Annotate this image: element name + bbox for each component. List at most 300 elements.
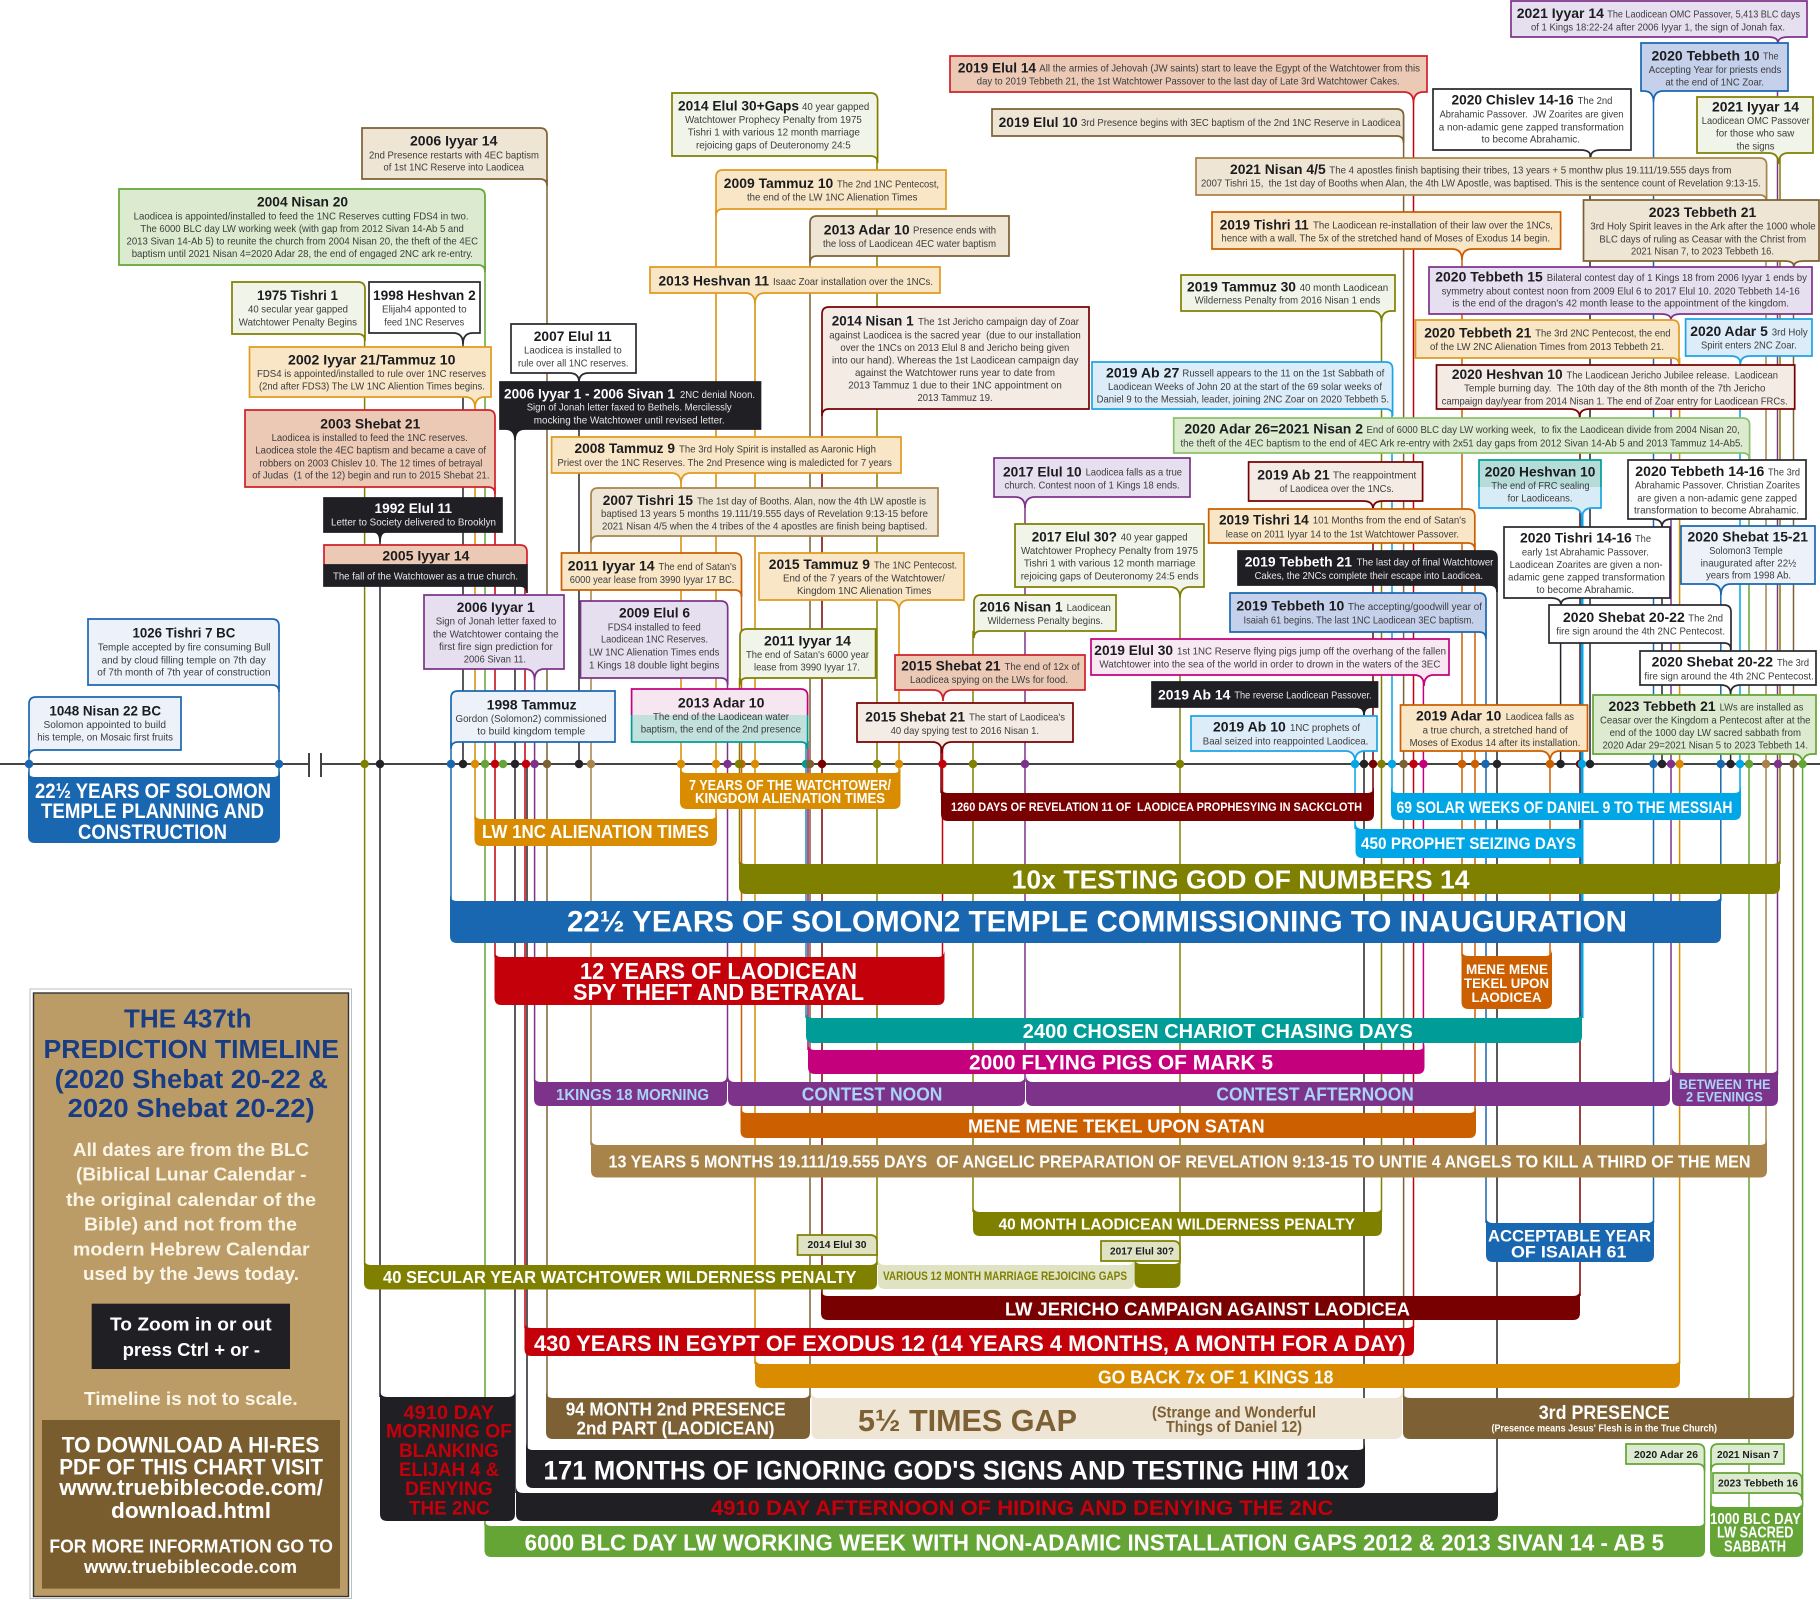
callout: 2020 Adar 26=2021 Nisan 2 [1174, 418, 1750, 460]
callout: 2013 Adar 10 presence ends [810, 216, 1009, 263]
callout: 1026 Tishri 7 BC: of 7th month of 7th year of construction [97, 667, 271, 679]
bar: mene mene tekel upon Laodicea: MENE MENE [1466, 962, 1548, 977]
text: calendar note: (Biblical Lunar Calendar - [76, 1164, 306, 1184]
callout: 2023 Tebbeth 21 green [1593, 695, 1816, 764]
callout: 2004 Nisan 20 [119, 189, 485, 272]
callout: 2019 Elul 14: 2019 Elul 14 [958, 59, 1036, 75]
callout: 2011 Iyyar 14 lease end: 2011 Iyyar 14 [568, 558, 655, 574]
callout: 2007 Elul 11 [511, 324, 636, 382]
bar: 10x testing God: 10x TESTING GOD OF NUMBERS 14 [1012, 864, 1470, 894]
callout: 2020 Tebbeth 10 [1641, 43, 1788, 102]
callout: 2013 Adar 10 presence ends: the loss of Laodicean 4EC water baptism [823, 238, 996, 250]
callout: 2019 Ab 21: of Laodicea over the 1NCs. [1280, 483, 1394, 495]
callout: 2019 Tammuz 30: 2019 Tammuz 30 [1187, 279, 1296, 295]
bar: 4910 day morning: BLANKING [399, 1440, 499, 1462]
bar: 12 years of Laodicean spy theft [494, 950, 944, 1005]
bar: 4910 day morning: DENYING [405, 1478, 493, 1500]
callout: 2004 Nisan 20: The 6000 BLC day LW working week (with gap from 2012 Sivan 14-Ab 5 and [140, 223, 464, 235]
callout: 2017 Elul 10: 2017 Elul 10 [1003, 463, 1082, 479]
bar: go back 7x: GO BACK 7x OF 1 KINGS 18 [1098, 1366, 1333, 1388]
bar: 6000 BLC day working week: 6000 BLC DAY LW WORKING WEEK WITH NON-ADAMIC INSTALLATION GAPS 2012 & 2013 SIVAN 14 - AB 5 [525, 1529, 1664, 1555]
label: 2017 Elul 30?: 2017 Elul 30? [1110, 1246, 1174, 1258]
callout: 2019 Elul 30: 1st 1NC Reserve flying pigs jump off the overhang of the fallen [1177, 645, 1446, 657]
text: calendar note: All dates are from the BLC [73, 1139, 309, 1160]
callout: 1026 Tishri 7 BC: 1026 Tishri 7 BC [132, 625, 235, 641]
bar: 430 years in Egypt: 430 YEARS IN EGYPT OF EXODUS 12 (14 YEARS 4 MONTHS, A MONTH FOR A DAY) [534, 1331, 1406, 1356]
callout: 2019 Ab 27: Daniel 9 to the Messiah, leader, joining 2NC Zoar on 2020 Tebbeth 5. [1097, 394, 1389, 406]
bar: 4910 day morning [380, 1390, 515, 1521]
callout: 2009 Tammuz 10: The 2nd 1NC Pentecost, [837, 178, 939, 190]
callout: 2019 Elul 14 [950, 56, 1427, 103]
text: calendar note [66, 1139, 316, 1284]
text: calendar note: used by the Jews today. [83, 1263, 299, 1284]
bar: various 12 month marriage rejoicing gaps [878, 1258, 1134, 1289]
callout: 2016 Nisan 1: Wilderness Penalty begins. [988, 615, 1103, 627]
callout: 2005 Iyyar 14: 2005 Iyyar 14 [382, 547, 470, 563]
callout: 2013 Adar 10 water baptism: The end of the Laodicean water [653, 711, 789, 723]
callout: 1998 Heshvan 2 [369, 282, 480, 344]
callout: 2019 Ab 10: Baal seized into reappointed Laodicea. [1203, 736, 1368, 748]
callout: 2014 Nisan 1: 2014 Nisan 1 [832, 313, 914, 329]
callout: 2013 Adar 10 water baptism [632, 689, 808, 749]
callout: 2017 Elul 30?: rejoicing gaps of Deuteronomy 24:5 ends [1021, 570, 1199, 582]
heading: the 437th prediction timeline: 2020 Shebat 20-22) [68, 1095, 315, 1123]
callout: 2013 Heshvan 11: 2013 Heshvan 11 [658, 273, 769, 289]
callout: 2019 Ab 10: 1NC prophets of [1290, 722, 1360, 734]
bar: 5½ times gap: 5½ TIMES GAP [858, 1403, 1077, 1438]
callout: 2011 Iyyar 14 olive: 2011 Iyyar 14 [764, 633, 851, 649]
callout: 2019 Tebbeth 21: The last day of final Watchtower [1357, 557, 1494, 569]
callout: 2016 Nisan 1 [974, 595, 1116, 638]
callout: 2020 Chislev 14-16: 2020 Chislev 14-16 [1452, 92, 1574, 108]
callout: 2015 Shebat 21 end of spying: 2015 Shebat 21 [901, 658, 1001, 674]
bar: contest afternoon [1026, 1075, 1670, 1106]
callout: 2008 Tammuz 9: Priest over the 1NC Reserves. The 2nd Presence wing is maledicted for 7 years [558, 457, 892, 469]
callout: 2006 Iyyar 1 sign of Jonah: 2006 Iyyar 1 [457, 599, 535, 615]
callout: 2023 Tebbeth 21 green: end of the 1000 day LW sacred sabbath from [1610, 727, 1801, 739]
callout: 2020 Chislev 14-16: a non-adamic gene zapped transformation [1439, 121, 1624, 133]
bar: LW 1NC alienation times [474, 812, 717, 846]
callout: 1998 Heshvan 2: feed 1NC Reserves [384, 316, 464, 328]
callout: 2023 Tebbeth 21 green: 2023 Tebbeth 21 [1608, 698, 1716, 714]
bar: 22½ years of Solomon: 22½ YEARS OF SOLOMON [35, 780, 271, 803]
bar: 2400 chosen chariot chasing days [806, 1011, 1582, 1043]
callout: 2020 Tebbeth 14-16: transformation to become Abrahamic. [1634, 505, 1799, 517]
bar: 22½ years of Solomon: TEMPLE PLANNING AND [41, 800, 264, 823]
callout: 2020 Tebbeth 14-16 [1628, 460, 1806, 527]
callout: 2020 Shebat 20-22 3rd fire sign: 2020 Shebat 20-22 [1652, 654, 1773, 670]
bar: 1000 BLC day sabbath: 1000 BLC DAY [1710, 1511, 1801, 1528]
callout: 2009 Tammuz 10 [716, 170, 946, 216]
callout: 2020 Tebbeth 21 orange: of the LW 2NC Alienation Times from 2013 Tebbeth 21. [1430, 341, 1664, 353]
callout: 1992 Elul 11: 1992 Elul 11 [374, 500, 452, 516]
bar: LW 1NC alienation times: LW 1NC ALIENATION TIMES [482, 821, 709, 842]
text: calendar note: the original calendar of the [66, 1189, 316, 1210]
label: 2014 Elul 30: 2014 Elul 30 [808, 1240, 867, 1251]
timeline axis with break mark [0, 753, 1820, 777]
label: 2014 Elul 30 [798, 1235, 877, 1255]
callout: 2015 Tammuz 9: Kingdom 1NC Alienation Times [797, 585, 931, 597]
bar: mene mene tekel upon Satan [740, 1106, 1476, 1138]
callout: 2013 Heshvan 11: Isaac Zoar installation over the 1NCs. [773, 276, 933, 288]
bar: contest noon [728, 1075, 1025, 1106]
callout: 2017 Elul 30?: Watchtower Prophecy Penalty from 1975 [1021, 545, 1198, 557]
bar: go back 7x [755, 1357, 1680, 1388]
callout: 2020 Tishri 14-16: 2020 Tishri 14-16 [1520, 530, 1632, 546]
bar: 40 secular year penalty: 40 SECULAR YEAR WATCHTOWER WILDERNESS PENALTY [383, 1267, 857, 1287]
callout: 2021 Iyyar 14 olive: for those who saw [1716, 128, 1795, 140]
callout: 2019 Elul 14: All the armies of Jehovah (JW saints) start to leave the Egypt of the Watchtower from this [1039, 63, 1420, 75]
callout: 2021 Iyyar 14 olive: the signs [1737, 140, 1774, 152]
callout: 2019 Tebbeth 10: The accepting/goodwill year of [1348, 601, 1482, 613]
callout: 2014 Nisan 1: 2013 Tammuz 19. [918, 392, 993, 404]
callout: 2021 Iyyar 14 OMC Passover: 2021 Iyyar 14 [1517, 5, 1604, 21]
callout: 2019 Tishri 11 [1212, 212, 1561, 260]
callout: 2021 Nisan 4/5 [1196, 158, 1767, 202]
callout: 2019 Tishri 11: hence with a wall. The 5x of the stretched hand of Moses of Exodus 14 begin. [1221, 233, 1550, 245]
callout: 2008 Tammuz 9: 2008 Tammuz 9 [574, 440, 675, 456]
callout: 2020 Tebbeth 21 orange: 2020 Tebbeth 21 [1424, 324, 1532, 340]
callout: 2020 Tishri 14-16: to become Abrahamic. [1536, 584, 1634, 596]
callout: 2020 Tebbeth 21 orange [1416, 320, 1679, 365]
bar: 22½ years of Solomon2 [450, 894, 1721, 943]
bar: acceptable year of Isaiah 61: ACCEPTABLE YEAR [1488, 1227, 1651, 1246]
callout: 2014 Elul 30+Gaps: Watchtower Prophecy Penalty from 1975 [685, 114, 862, 126]
callout: 2020 Adar 26=2021 Nisan 2: End of 6000 BLC day LW working week, to fix the Laodicean divide from 2004 Nisan 20, [1366, 424, 1740, 436]
callout: 2021 Nisan 4/5: 2021 Nisan 4/5 [1230, 161, 1326, 177]
callout: 1998 Tammuz [451, 691, 615, 749]
bar: 12 years of Laodicean spy theft: 12 YEARS OF LAODICEAN [580, 958, 857, 984]
callout: 2019 Elul 14: day to 2019 Tebbeth 21, the 1st Watchtower Passover to the last day of Late 3rd Watchtower Cakes. [977, 76, 1400, 88]
label: 2017 Elul 30? [1101, 1241, 1180, 1261]
callout: 1048 Nisan 22 BC: his temple, on Mosaic first fruits [37, 732, 173, 744]
panel: download information: www.truebiblecode.com/ [58, 1475, 323, 1500]
callout: 2007 Tishri 15: 2007 Tishri 15 [603, 492, 693, 508]
callout: 2019 Adar 10: a true church, a stretched hand of [1423, 724, 1568, 736]
callout: 2003 Shebat 21: robbers on 2003 Chislev 10. The 12 times of betrayal [259, 457, 482, 469]
bar: 4910 day morning: ELIJAH 4 & [399, 1459, 499, 1481]
callout: 2019 Ab 27: Russell appears to the 11 on the 1st Sabbath of [1182, 368, 1384, 380]
callout: 1998 Tammuz: 1998 Tammuz [487, 696, 576, 712]
callout: 2020 Tebbeth 21 orange: The 3rd 2NC Pentecost, the end [1535, 328, 1671, 340]
callout: 2011 Iyyar 14 lease end: The end of Satan's [658, 561, 736, 573]
callout: 2006 Iyyar 14: of 1st 1NC Reserve into Laodicea [384, 162, 524, 174]
callout: 2004 Nisan 20: Laodicea is appointed/installed to feed the 1NC Reserves cutting FDS4 in two. [134, 210, 469, 222]
callout: 2003 Shebat 21 [245, 410, 495, 494]
callout: 2014 Elul 30+Gaps: rejoicing gaps of Deuteronomy 24:5 [696, 139, 851, 151]
callout: 2020 Chislev 14-16: to become Abrahamic. [1482, 134, 1580, 146]
callout: 2020 Shebat 15-21: Solomon3 Temple [1709, 545, 1783, 557]
bar: 1 Kings 18 morning: 1KINGS 18 MORNING [556, 1087, 709, 1104]
bar: 5½ times gap [812, 1391, 1402, 1439]
panel: download information [42, 1420, 340, 1589]
callout: 2015 Shebat 21 end of spying [895, 655, 1085, 701]
label: 2020 Adar 26: 2020 Adar 26 [1634, 1450, 1698, 1461]
callout: 2020 Shebat 15-21: years from 1998 Ab. [1706, 569, 1791, 581]
callout: 2020 Heshvan 10 FRC sealing: for Laodiceans. [1508, 493, 1572, 505]
callout: 2014 Nisan 1: The 1st Jericho campaign day of Zoar [918, 316, 1079, 328]
callout: 2015 Shebat 21 spying test: 40 day spying test to 2016 Nisan 1. [891, 725, 1039, 737]
bar: 4910 day morning: 4910 DAY [404, 1402, 494, 1424]
callout: 2013 Adar 10 presence ends: Presence ends with [913, 225, 996, 237]
callouts centre cluster [632, 56, 1767, 762]
callout: 2023 Tebbeth 21 tan [1584, 200, 1819, 266]
bar: LW Jericho campaign [821, 1289, 1580, 1320]
callout: 2019 Tebbeth 21 [1238, 551, 1497, 592]
callout: 2009 Tammuz 10: the end of the LW 1NC Alienation Times [747, 191, 918, 203]
bar: 430 years in Egypt [524, 1321, 1414, 1356]
callout: 2007 Elul 11: rule over all 1NC reserves. [518, 357, 628, 369]
small bar date labels [798, 1235, 1802, 1500]
callout: 2020 Adar 5: Spirit enters 2NC Zoar. [1701, 340, 1797, 352]
callout: 2011 Iyyar 14 olive [740, 629, 876, 685]
callout: 2015 Shebat 21 spying test: The start of Laodicea's [969, 712, 1065, 724]
bar: 2000 flying pigs [808, 1043, 1424, 1074]
label: 2020 Adar 26 [1626, 1444, 1704, 1471]
bar: between the 2 evenings: BETWEEN THE [1679, 1076, 1770, 1092]
bar: 3rd presence [1403, 1391, 1794, 1439]
bar: 22½ years of Solomon2: 22½ YEARS OF SOLOMON2 TEMPLE COMMISSIONING TO INAUGURATION [567, 906, 1627, 938]
callout: 2019 Tishri 14 [1209, 509, 1475, 550]
bar: 7 years of the Watchtower [680, 766, 900, 809]
callout: 2017 Elul 30?: 40 year gapped [1121, 532, 1188, 544]
panel: download information: FOR MORE INFORMATION GO TO [49, 1536, 333, 1556]
callout: 2020 Tishri 14-16: The [1635, 533, 1651, 545]
bar: 450 prophet seizing days [1356, 822, 1584, 858]
callout: 2020 Shebat 20-22 2nd fire sign: fire sign around the 4th 2NC Pentecost. [1556, 626, 1725, 638]
callout: 2020 Chislev 14-16: Abrahamic Passover. JW Zoarites are given [1440, 109, 1624, 121]
callout: 2006 Iyyar 1 - 2006 Sivan 1: Sign of Jonah letter faxed to Bethels. Mercilessly [527, 402, 732, 414]
callout: 2021 Iyyar 14 OMC Passover: of 1 Kings 18:22-24 after 2006 Iyyar 1, the sign of Jonah fax. [1531, 21, 1785, 33]
callout: 2009 Elul 6: FDS4 installed to feed [608, 621, 701, 633]
callout: 2020 Heshvan 10 FRC sealing [1479, 460, 1601, 519]
callout: 2008 Tammuz 9 [552, 437, 901, 484]
callout: 2006 Iyyar 14: 2006 Iyyar 14 [410, 133, 498, 149]
callout: 1975 Tishri 1: 1975 Tishri 1 [257, 287, 338, 303]
callout: 2011 Iyyar 14 lease end: 6000 year lease from 3990 Iyyar 17 BC. [570, 574, 734, 586]
callout: 2015 Tammuz 9: The 1NC Pentecost. [874, 559, 957, 571]
callout: 1026 Tishri 7 BC: Temple accepted by fire consuming Bull [98, 642, 270, 654]
callout: 2019 Ab 14: The reverse Laodicean Passover. [1234, 689, 1372, 701]
label: 2023 Tebbeth 16: 2023 Tebbeth 16 [1718, 1478, 1798, 1490]
bar: 2400 chosen chariot chasing days: 2400 CHOSEN CHARIOT CHASING DAYS [1023, 1021, 1413, 1043]
callout: 2020 Tebbeth 10: The [1763, 51, 1779, 63]
bar: 13 years 5 months [591, 1138, 1767, 1178]
callout: 1026 Tishri 7 BC: and by cloud filling temple on 7th day [102, 654, 266, 666]
callout: 2014 Nisan 1: against Laodicea is the sacred year (due to our installation [829, 329, 1081, 341]
bar: 5½ times gap: Things of Daniel 12) [1166, 1419, 1302, 1436]
bar: 7 years of the Watchtower: 7 YEARS OF THE WATCHTOWER/ [689, 778, 891, 794]
callout: 2004 Nisan 20: 2004 Nisan 20 [257, 194, 348, 210]
callout: 2020 Shebat 20-22 3rd fire sign: The 3rd [1777, 657, 1809, 669]
bar: between the 2 evenings: 2 EVENINGS [1686, 1089, 1763, 1105]
label: 2021 Nisan 7 [1711, 1444, 1784, 1471]
callout: 2020 Tebbeth 15: symmetry about contest noon from 2009 Elul 6 to 2017 Elul 10. 2020 Tebbeth 14-16 [1442, 285, 1800, 297]
callout: 2015 Tammuz 9: 2015 Tammuz 9 [769, 556, 870, 572]
callout: 2019 Tebbeth 10: 2019 Tebbeth 10 [1236, 598, 1345, 614]
callout: 2007 Tishri 15: 2021 Nisan 4/5 when the 4 tribes of the 4 apostles are finish being baptised. [602, 521, 927, 533]
bar: contest noon: CONTEST NOON [802, 1084, 942, 1104]
callout: 2021 Iyyar 14 OMC Passover [1511, 1, 1807, 43]
callout: 1975 Tishri 1: Watchtower Penalty Begins [239, 316, 357, 328]
callout: 2020 Heshvan 10 Jubilee [1436, 365, 1795, 417]
callout: 2019 Ab 27: Laodicean Weeks of John 20 at the start of the 69 solar weeks of [1108, 381, 1382, 393]
callout: 2020 Tebbeth 15 [1429, 267, 1812, 320]
callout: 2011 Iyyar 14 olive: The end of Satan's 6000 year [746, 649, 869, 661]
callout: 2009 Tammuz 10: 2009 Tammuz 10 [724, 175, 834, 191]
callout: 2020 Adar 26=2021 Nisan 2: the theft of the 4EC baptism to the end of 4EC Ark re-entry with 2x51 day gaps from 2012 Sivan 14-Ab 5 and 2013 Tammuz 14-Ab5. [1180, 437, 1743, 449]
callout: 2016 Nisan 1: Laodicean [1067, 602, 1111, 614]
callout: 2020 Tebbeth 15: is the end of the dragon's 42 month lease to the appointment of the kingdom. [1452, 298, 1789, 310]
bar: 1000 BLC day sabbath: SABBATH [1724, 1538, 1786, 1555]
callout: 2009 Elul 6: Laodicean 1NC Reserves. [601, 634, 708, 646]
bar: 2000 flying pigs: 2000 FLYING PIGS OF MARK 5 [969, 1052, 1273, 1074]
callout: 2013 Adar 10 presence ends: 2013 Adar 10 [824, 221, 910, 237]
bar: 69 solar weeks: 69 SOLAR WEEKS OF DANIEL 9 TO THE MESSIAH [1396, 799, 1732, 817]
callout: 1992 Elul 11: Letter to Society delivered to Brooklyn [331, 517, 496, 529]
callout: 2004 Nisan 20: baptism until 2021 Nisan 4=2020 Adar 28, the end of engaged 2NC ark re-entry. [132, 248, 473, 260]
callout: 2004 Nisan 20: 2013 Sivan 14-Ab 5) to reunite the church from 2004 Nisan 20, the theft of the 4EC [126, 235, 478, 247]
callout: 2003 Shebat 21: Laodicea is installed to feed the 1NC reserves. [272, 432, 468, 444]
callout: 2006 Iyyar 1 sign of Jonah: the Watchtower containg the [433, 628, 559, 640]
callout: 2003 Shebat 21: Laodicea stole the 4EC baptism and became a cave of [255, 445, 486, 457]
callout: 2019 Ab 27: 2019 Ab 27 [1106, 364, 1180, 380]
callout: 2019 Tebbeth 10 [1230, 593, 1486, 639]
callout: 2020 Shebat 15-21: inaugurated after 22½ [1701, 557, 1797, 569]
callout: 2019 Elul 30: Watchtower into the sea of the world in order to drown in the waters of the 3EC [1099, 659, 1441, 671]
callout: 2019 Ab 10: 2019 Ab 10 [1213, 719, 1286, 735]
callout: 2014 Elul 30+Gaps: 40 year gapped [802, 101, 869, 113]
bar: 1260 days: 1260 DAYS OF REVELATION 11 OF LAODICEA PROPHESYING IN SACKCLOTH [951, 800, 1362, 814]
callouts right cluster [1416, 1, 1819, 764]
callout: 2014 Nisan 1: into our hand). Whereas the 1st Laodicean campaign day [832, 355, 1079, 367]
callout: 2020 Shebat 20-22 2nd fire sign [1549, 605, 1731, 650]
callout: 2021 Nisan 4/5: 2007 Tishri 15, the 1st day of Booths when Alan, the 4th LW Apostle, was baptised. This is the sentence count of Revelation 9:13-15. [1201, 177, 1761, 189]
bar: 40 month Laodicean wilderness penalty: 40 MONTH LAODICEAN WILDERNESS PENALTY [999, 1216, 1355, 1234]
callout: 2020 Adar 5 [1686, 319, 1812, 364]
text: not to scale: Timeline is not to scale. [84, 1388, 298, 1409]
callout: 2011 Iyyar 14 olive: lease from 3990 Iyyar 17. [754, 662, 860, 674]
callout: 2006 Iyyar 1 - 2006 Sivan 1: mocking the Watchtower until revised letter. [534, 415, 725, 427]
callout: 2002 Iyyar 21/Tammuz 10 [250, 347, 491, 408]
callout: 2006 Iyyar 1 sign of Jonah [424, 595, 564, 680]
bar: 69 solar weeks [1391, 786, 1741, 820]
callout: 2015 Shebat 21 end of spying: Laodicea spying on the LWs for food. [910, 674, 1068, 686]
callout: 2007 Tishri 15 [591, 488, 938, 543]
callout: zoom instruction: press Ctrl + or - [123, 1340, 260, 1360]
callout: 2020 Heshvan 10 FRC sealing: 2020 Heshvan 10 [1485, 463, 1596, 479]
callout: 2002 Iyyar 21/Tammuz 10: (2nd after FDS3) The LW 1NC Aliention Times begins. [259, 381, 485, 393]
callout: 1992 Elul 11 [324, 498, 502, 542]
callout: 2006 Iyyar 1 sign of Jonah: 2006 Sivan 11. [464, 654, 526, 666]
callout: 2019 Tishri 11: 2019 Tishri 11 [1220, 216, 1309, 232]
callout: 2006 Iyyar 1 - 2006 Sivan 1 [500, 382, 760, 440]
panel: download information: download.html [111, 1498, 271, 1523]
callout: 2020 Tishri 14-16: adamic gene zapped transformation [1508, 572, 1665, 584]
bar: olive penalty end stub [1134, 1257, 1180, 1288]
callout: 2014 Elul 30+Gaps [672, 93, 878, 163]
bar: mene mene tekel upon Laodicea: LAODICEA [1472, 990, 1542, 1005]
bar: 4910 day afternoon: 4910 DAY AFTERNOON OF HIDING AND DENYING THE 2NC [711, 1496, 1333, 1520]
bar: 4910 day afternoon [516, 1486, 1498, 1521]
bar: 171 months: 171 MONTHS OF IGNORING GOD'S SIGNS AND TESTING HIM 10x [544, 1456, 1349, 1486]
callout: 2019 Tammuz 30: 40 month Laodicean [1300, 282, 1388, 294]
bar: 22½ years of Solomon: CONSTRUCTION [78, 821, 227, 844]
callout: 2006 Iyyar 14 [362, 128, 547, 186]
bar: 94 month 2nd presence [546, 1391, 810, 1439]
callout: 2019 Elul 10 [992, 109, 1404, 143]
callout: 2019 Tebbeth 21: Cakes, the 2NCs complete their escape into Laodicea. [1255, 570, 1483, 582]
heading: the 437th prediction timeline: (2020 Shebat 20-22 & [55, 1066, 328, 1094]
callout: 2020 Adar 26=2021 Nisan 2: 2020 Adar 26=2021 Nisan 2 [1184, 421, 1363, 437]
callout: 2019 Tishri 11: The Laodicean re-installation of their law over the 1NCs, [1313, 220, 1553, 232]
callout: 2002 Iyyar 21/Tammuz 10: FDS4 is appointed/installed to rule over 1NC reserves [257, 368, 486, 380]
bar: mene mene tekel upon Laodicea: TEKEL UPON [1464, 976, 1549, 991]
bar: 12 years of Laodicean spy theft: SPY THEFT AND BETRAYAL [573, 979, 864, 1005]
callout: 1998 Tammuz: Gordon (Solomon2) commissioned [456, 713, 607, 725]
callout: 2020 Tebbeth 14-16: Abrahamic Passover. Christian Zoarites [1635, 480, 1800, 492]
text: calendar note: Bible) and not from the [84, 1214, 297, 1235]
callout: 2013 Adar 10 water baptism: 2013 Adar 10 [678, 694, 765, 710]
callout: 2019 Ab 10 [1191, 716, 1377, 762]
callout: 2020 Heshvan 10 Jubilee: The Laodicean Jericho Jubilee release. Laodicean [1566, 369, 1778, 381]
callout: 2009 Elul 6: 2009 Elul 6 [619, 605, 690, 621]
bar: acceptable year of Isaiah 61 [1486, 1216, 1654, 1262]
callout: 2003 Shebat 21: of Judas (1 of the 12) begin and run to 2015 Shebat 21. [252, 470, 490, 482]
bar: 22½ years of Solomon [28, 770, 280, 844]
bar: 1260 days [941, 786, 1374, 821]
callout: 2020 Tebbeth 14-16: 2020 Tebbeth 14-16 [1635, 463, 1765, 479]
bar: mene mene tekel upon Laodicea [1462, 949, 1552, 1009]
callout: 2020 Tishri 14-16: early 1st Abrahamic Passover. [1522, 546, 1649, 558]
callout: 2019 Tebbeth 21: 2019 Tebbeth 21 [1245, 553, 1352, 569]
callout: 2019 Elul 10: 2019 Elul 10 [999, 114, 1078, 130]
callout: 2023 Tebbeth 21 tan: 2023 Tebbeth 21 [1649, 204, 1757, 220]
callout: 2007 Tishri 15: The 1st day of Booths. Alan, now the 4th LW apostle is [697, 496, 926, 508]
callout: 2019 Ab 21: The reappointment [1333, 470, 1416, 482]
callout: 1026 Tishri 7 BC [88, 619, 279, 692]
bar: 5½ times gap: (Strange and Wonderful [1152, 1404, 1316, 1422]
bar: 4910 day morning: MORNING OF [386, 1421, 512, 1443]
bar: LW Jericho campaign: LW JERICHO CAMPAIGN AGAINST LAODICEA [1005, 1298, 1410, 1320]
bar: contest afternoon: CONTEST AFTERNOON [1216, 1084, 1414, 1104]
callout: 2013 Heshvan 11 [650, 267, 940, 304]
callout: 2019 Tishri 14: lease on 2011 Iyyar 14 to the 1st Watchtower Passover. [1226, 528, 1459, 540]
callout: 2020 Heshvan 10 Jubilee: 2020 Heshvan 10 [1452, 366, 1563, 382]
callout: 1975 Tishri 1 [232, 282, 365, 341]
callout: 2015 Shebat 21 end of spying: The end of 12x of [1004, 661, 1080, 673]
callout: 2020 Tishri 14-16: Laodicean Zoarites are given a non- [1510, 559, 1663, 571]
callout: 2019 Elul 30: 2019 Elul 30 [1094, 642, 1173, 658]
bar: 7 years of the Watchtower: KINGDOM ALIENATION TIMES [695, 791, 885, 807]
callout: 2020 Heshvan 10 FRC sealing: The end of FRC sealing [1491, 480, 1590, 492]
callout: 2017 Elul 30? [1015, 524, 1204, 598]
heading: the 437th prediction timeline: THE 437th [124, 1006, 252, 1034]
callout: 2019 Tammuz 30 [1181, 275, 1395, 322]
panel: download information: www.truebiblecode.com [83, 1556, 297, 1577]
callout: 2009 Elul 6: LW 1NC Alienation Times ends [589, 646, 719, 658]
callout: 2020 Shebat 15-21: 2020 Shebat 15-21 [1688, 528, 1808, 544]
callout: 2020 Adar 5: 2020 Adar 5 [1690, 323, 1768, 339]
callout: 2019 Ab 27 [1092, 362, 1393, 416]
callout: 2019 Tebbeth 10: Isaiah 61 begins. The last 1NC Laodicean 3EC baptism. [1244, 614, 1474, 626]
bar: 10x testing God [739, 857, 1780, 894]
bar: 171 months [526, 1443, 1365, 1488]
callout: 2017 Elul 30?: 2017 Elul 30? [1032, 528, 1117, 544]
timeline date dots [25, 760, 1807, 768]
callout: 2019 Elul 30 [1091, 639, 1449, 686]
callout: 2020 Tishri 14-16 [1504, 527, 1670, 605]
